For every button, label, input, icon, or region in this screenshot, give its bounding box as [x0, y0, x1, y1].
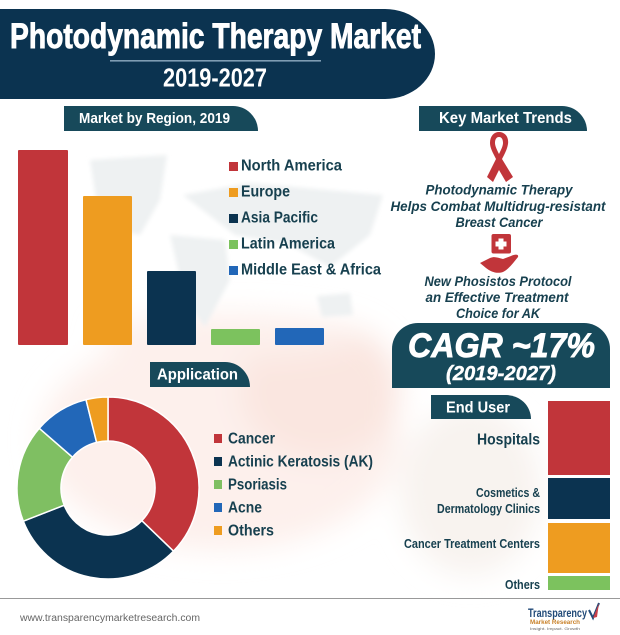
donut chart: application	[17, 397, 199, 579]
legend: application: Others	[228, 522, 274, 540]
trend text: Phosistos protocol: an Effective Treatment	[426, 289, 570, 305]
subtitle years: 2019-2027	[163, 62, 267, 92]
heading: end user	[431, 395, 531, 419]
end user labels: Cosmetics &	[476, 485, 540, 500]
logo: Transparency Market Research: Market Research	[530, 620, 580, 626]
legend: application: Cancer	[228, 430, 275, 448]
trend text: breast cancer	[390, 182, 607, 230]
legend: regions: North America	[241, 158, 342, 174]
footer url: www.transparencymarketresearch.com	[19, 613, 200, 624]
end user stacked bars	[548, 401, 610, 590]
heading: market by region: Market by Region, 2019	[79, 111, 230, 127]
callout: CAGR: CAGR ~17%	[408, 327, 595, 365]
legend: application: Acne	[228, 500, 262, 516]
background: world map and tissue texture	[40, 155, 540, 575]
trend text: breast cancer: Photodynamic Therapy	[426, 182, 574, 198]
heading: key market trends	[419, 106, 587, 131]
icon: hand holding medical cross	[480, 234, 518, 273]
legend: application: Actinic Keratosis (AK)	[228, 454, 373, 470]
legend: regions: Latin America	[241, 236, 335, 252]
legend: application	[214, 430, 373, 540]
title: Photodynamic Therapy Market	[10, 17, 421, 56]
legend: regions: Asia Pacific	[241, 210, 318, 226]
end user labels: Others	[505, 577, 540, 592]
logo: Transparency Market Research: Transparency	[528, 608, 587, 620]
heading: market by region	[64, 106, 258, 131]
logo: Transparency Market Research: Insight. Impact. Growth	[530, 626, 580, 631]
heading: key market trends: Key Market Trends	[439, 110, 572, 127]
legend: regions: Middle East & Africa	[241, 262, 381, 278]
heading: application: Application	[157, 366, 238, 384]
end user labels: Dermatology Clinics	[437, 501, 540, 516]
trend text: Phosistos protocol	[424, 273, 573, 321]
callout: CAGR: (2019-2027)	[446, 363, 556, 385]
logo: Transparency Market Research	[528, 603, 599, 631]
callout: CAGR	[392, 323, 610, 388]
title banner	[0, 9, 435, 99]
trend text: Phosistos protocol: Choice for AK	[456, 305, 541, 321]
trend text: breast cancer: Helps Combat Multidrug-resistant	[390, 198, 607, 214]
end user labels	[404, 432, 540, 592]
legend: regions: Europe	[241, 184, 290, 200]
trend text: Phosistos protocol: New Phosistos Protocol	[424, 273, 573, 289]
end user labels: Cancer Treatment Centers	[404, 536, 540, 551]
icon: awareness ribbon	[487, 132, 513, 182]
trend text: breast cancer: Breast Cancer	[456, 214, 544, 230]
legend: regions	[229, 158, 381, 278]
heading: end user: End User	[446, 400, 510, 416]
legend: application: Psoriasis	[228, 476, 287, 494]
end user labels: Hospitals	[477, 432, 540, 448]
heading: application	[150, 362, 250, 387]
bar chart: market by region	[18, 150, 324, 345]
